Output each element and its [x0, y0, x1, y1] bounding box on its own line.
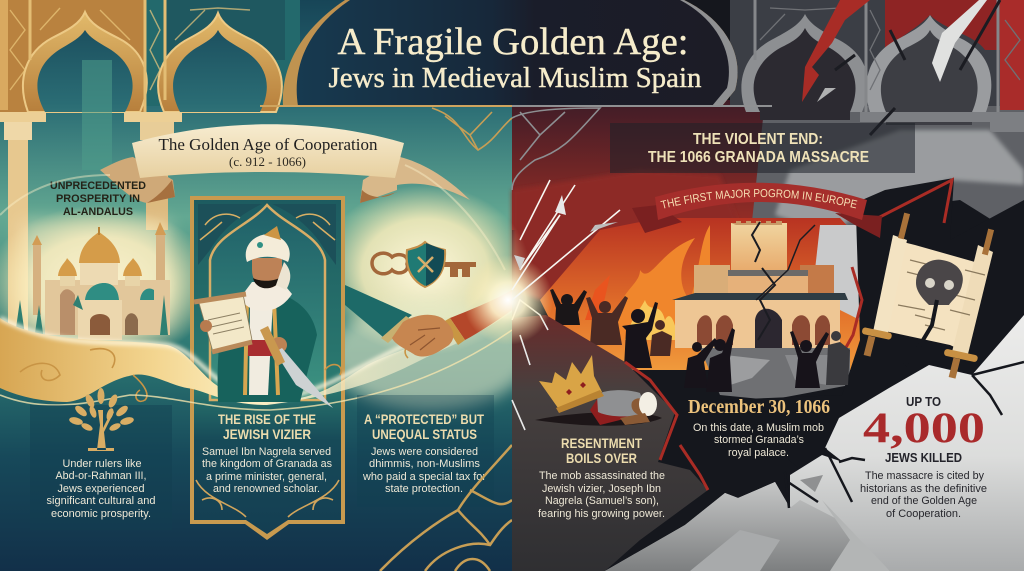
text block: date: royal palace. — [728, 447, 789, 459]
panel: fire scene — [540, 218, 880, 370]
ribbon: Golden Age heading: (c. 912 - 1066) — [229, 154, 306, 169]
label: prosperity heading: PROSPERITY IN — [56, 193, 140, 205]
text block: date: December 30, 1066 — [688, 396, 830, 418]
title text: A Fragile Golden Age: — [338, 21, 688, 63]
text block: protected status: UNEQUAL STATUS — [372, 426, 477, 442]
label: prosperity heading: AL-ANDALUS — [63, 206, 133, 218]
text block: protected status — [362, 411, 486, 495]
panel: golden age background — [0, 0, 512, 571]
title text: Jews in Medieval Muslim Spain — [328, 63, 702, 94]
starburst: central fracture flash — [463, 180, 620, 345]
text block: date: stormed Granada’s — [714, 434, 804, 446]
statistic: death toll: JEWS KILLED — [885, 450, 962, 465]
text block: prosperity: Jews experienced — [58, 483, 144, 495]
text block: vizier: JEWISH VIZIER — [223, 426, 311, 442]
text block: prosperity: significant cultural and — [46, 495, 156, 507]
text block: resentment: fearing his growing power. — [538, 508, 665, 520]
text block: resentment: BOILS OVER — [566, 450, 637, 466]
illustration: domed city of al-Andalus — [15, 222, 170, 340]
text block: protected status: Jews were considered — [371, 446, 478, 458]
title banner — [260, 0, 772, 106]
glow: cream haze behind city and key — [0, 185, 530, 410]
arches: broken grey stonework — [730, 0, 1024, 135]
text block: vizier: THE RISE OF THE — [218, 411, 316, 427]
ornament: bottom corner lattice — [380, 445, 512, 571]
panel: violent end heading band — [610, 123, 915, 173]
panel: vizier frame — [190, 196, 345, 540]
ribbon: first major pogrom — [632, 182, 882, 238]
illustration: broken scroll with skull — [861, 213, 994, 379]
text block: vizier: the kingdom of Granada as — [202, 458, 332, 470]
region: dark rock left — [512, 300, 708, 571]
label: prosperity heading: UNPRECEDENTED — [50, 180, 146, 192]
illustration: handshake — [345, 285, 512, 357]
text block: date: On this date, a Muslim mob — [693, 422, 824, 434]
statistic: death toll: UP TO — [906, 394, 941, 409]
statistic: death toll: of Cooperation. — [886, 508, 961, 520]
swoosh: golden stream — [0, 165, 512, 410]
text block: resentment: RESENTMENT — [561, 435, 642, 451]
statistic: death toll: end of the Golden Age — [871, 495, 977, 507]
illustration: fallen vizier and crown — [535, 355, 662, 426]
ornament: top lattice corners — [432, 108, 600, 190]
text block: vizier: and renowned scholar. — [213, 483, 320, 495]
text block: prosperity: Under rulers like — [62, 458, 142, 470]
illustration: key and shield — [372, 242, 476, 287]
panel: prosperity text backdrop — [30, 405, 172, 530]
arches: golden stonework — [0, 0, 300, 340]
icon: golden tree — [68, 388, 135, 451]
ribbon: first major pogrom: THE FIRST MAJOR POGROM IN EUROPE — [660, 189, 858, 208]
text block: date — [688, 396, 830, 459]
ribbon: Golden Age heading — [100, 124, 470, 203]
statistic: death toll: historians as the definitive — [860, 483, 987, 495]
region: cracked ground and dark mass — [700, 178, 1024, 480]
text block: resentment: Jewish vizier, Joseph Ibn — [542, 483, 661, 495]
violent end heading text — [648, 131, 869, 166]
text block: prosperity: economic prosperity. — [51, 508, 151, 520]
text block: protected status: state protection. — [385, 483, 463, 495]
text block: vizier: Samuel Ibn Nagrela served — [202, 446, 331, 458]
text block: prosperity: Abd-or-Rahman III, — [56, 470, 146, 482]
text block: protected status: dhimmis, non-Muslims — [369, 458, 480, 470]
statistic: death toll: The massacre is cited by — [865, 470, 984, 482]
heading text: The Golden Age of Cooperation — [158, 135, 378, 154]
title text — [328, 21, 702, 94]
violent end heading text: THE VIOLENT END: — [693, 131, 823, 148]
text block: protected status: A “PROTECTED” BUT — [364, 411, 484, 427]
text block: resentment: The mob assassinated the — [539, 470, 665, 482]
illustration: rioting silhouettes — [550, 289, 850, 392]
illustration: Granada palace — [672, 221, 848, 348]
text block: protected status: who paid a special tax for — [362, 471, 486, 483]
illustration: vizier figure — [194, 226, 333, 408]
text block: resentment: Nagrela (Samuel’s son), — [545, 495, 659, 507]
violent end heading text: THE 1066 GRANADA MASSACRE — [648, 149, 869, 166]
region: pale rock bottom right — [605, 315, 1024, 571]
panel: violent end background — [512, 0, 1024, 571]
statistic: death toll — [860, 394, 987, 520]
text block: vizier: a prime minister, general, — [206, 471, 327, 483]
text block: vizier — [202, 411, 332, 495]
text block: resentment — [538, 435, 665, 520]
text block: prosperity — [46, 458, 156, 520]
statistic: death toll: 4,000 — [863, 405, 985, 452]
label: prosperity heading — [50, 180, 146, 218]
panel: protected text backdrop — [357, 395, 494, 507]
